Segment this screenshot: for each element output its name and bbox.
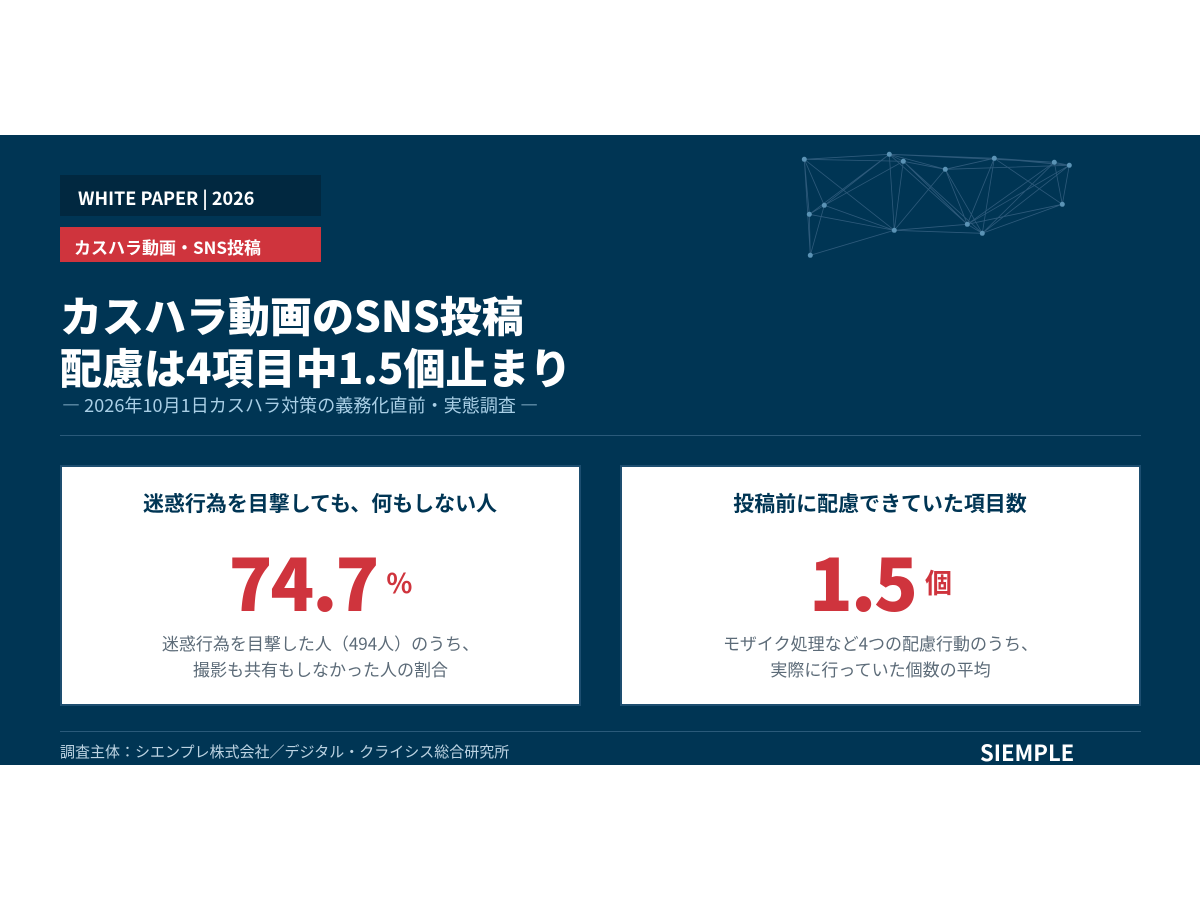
panel heading: 迷惑行為を目撃しても、何もしない人 (143, 488, 497, 518)
title (60, 284, 571, 397)
panel description (162, 630, 479, 681)
title: 配慮は4項目中1.5個止まり (60, 336, 571, 397)
header divider (60, 435, 1141, 436)
panel description: 撮影も共有もしなかった人の割合 (193, 656, 448, 681)
footer divider (60, 731, 1141, 732)
panel description: 迷惑行為を目撃した人（494人）のうち、 (162, 630, 479, 655)
subtitle: ― 2026年10月1日カスハラ対策の義務化直前・実態調査 ― (62, 392, 538, 418)
panel description: 実際に行っていた個数の平均 (770, 656, 991, 681)
source credit: 調査主体：シエンプレ株式会社／デジタル・クライシス総合研究所 (60, 741, 509, 762)
panel description: モザイク処理など4つの配慮行動のうち、 (723, 630, 1038, 655)
category tag: カスハラ動画・SNS投稿 (74, 234, 261, 259)
stat: 1.5 items: 個 (925, 562, 952, 601)
stat: 1.5 items: 1.5 (809, 527, 916, 632)
panel: care items (620, 465, 1141, 706)
panel heading: 投稿前に配慮できていた項目数 (733, 488, 1027, 518)
panel description (723, 630, 1038, 681)
stat: 74.7%: 74.7 (229, 527, 377, 632)
white paper badge (60, 175, 321, 216)
stat: 74.7%: % (386, 562, 412, 601)
title: カスハラ動画のSNS投稿 (60, 284, 524, 345)
panel: bystanders (60, 465, 581, 706)
slide background (0, 135, 1200, 765)
white paper badge: WHITE PAPER | 2026 (78, 185, 254, 211)
network graphic (802, 152, 1072, 258)
category tag (60, 227, 321, 262)
